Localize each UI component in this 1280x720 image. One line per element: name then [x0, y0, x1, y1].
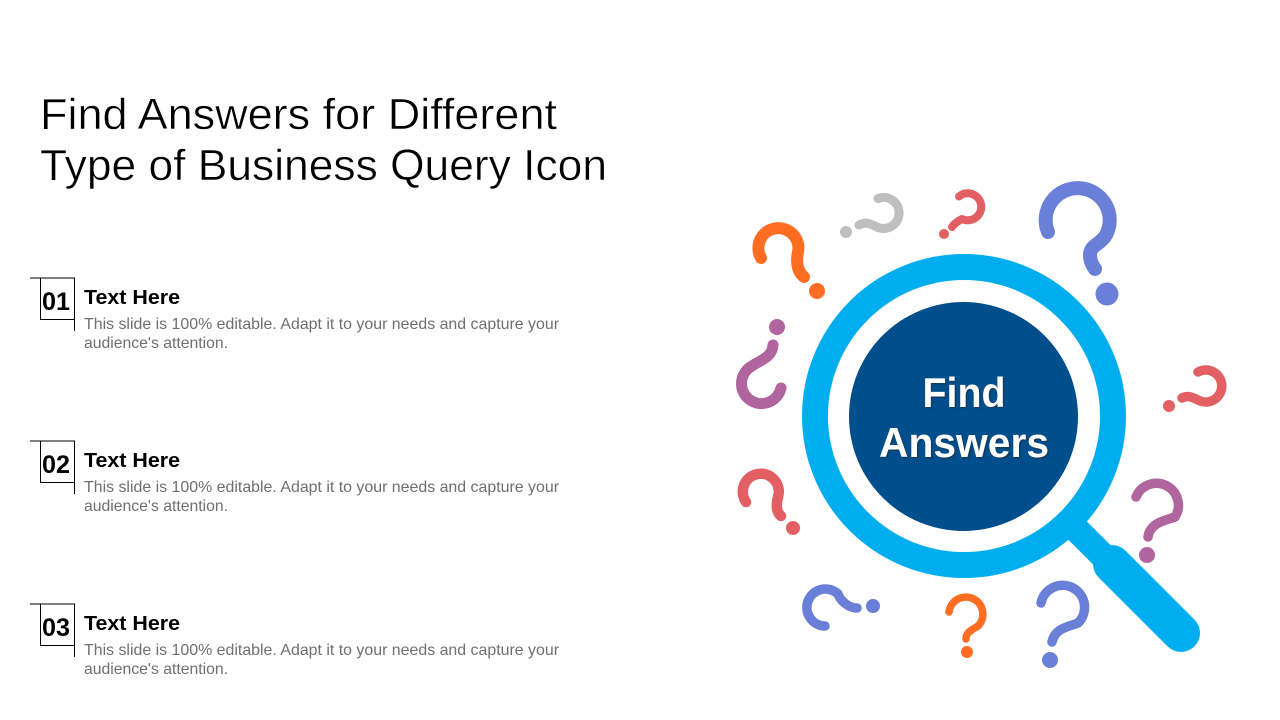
icon: blue question mark bottom: [1041, 585, 1085, 668]
number badge 02: 02: [42, 451, 70, 479]
handle: [1062, 515, 1181, 633]
number badge 03: 03: [42, 614, 70, 642]
item heading 01: Text Here: [84, 286, 180, 309]
icon: purple question mark right: [1136, 483, 1178, 563]
icon: orange question mark bottom: [949, 597, 983, 658]
item 01: [30, 278, 560, 352]
lens centre: [849, 302, 1078, 531]
item body 01: [84, 316, 560, 352]
lens ring: [815, 267, 1113, 565]
title: Find Answers for Different: [40, 90, 557, 139]
item heading 02: Text Here: [84, 449, 180, 472]
number badge 01: [30, 278, 74, 331]
icon: blue question mark large: [1046, 188, 1118, 306]
item body 03: [84, 642, 560, 678]
item body 03: This slide is 100% editable. Adapt it to your needs and capture your: [84, 642, 560, 659]
lens label: Find: [924, 370, 1007, 418]
item 02: [30, 441, 560, 515]
title: Type of Business Query Icon: [40, 141, 607, 190]
magnifying glass: [815, 267, 1181, 633]
number badge 03: [30, 604, 74, 657]
icon: purple question mark left: [741, 319, 785, 404]
icon: orange question mark upper left: [758, 228, 825, 299]
item 03: [30, 604, 560, 678]
title: [40, 90, 607, 190]
icon: grey question mark: [840, 197, 899, 238]
item body 02: [84, 479, 560, 515]
lens label: Find: [922, 369, 1006, 416]
item body 02: This slide is 100% editable. Adapt it to your needs and capture your: [84, 479, 560, 496]
item body 03: audience's attention.: [84, 661, 228, 678]
icon: red question mark lower left: [743, 474, 800, 535]
item body 02: audience's attention.: [84, 498, 228, 515]
icon: blue question mark lower: [807, 589, 880, 626]
lens label: Answers: [880, 420, 1050, 468]
item body 01: audience's attention.: [84, 335, 228, 352]
icon: red question mark right: [1163, 370, 1222, 412]
icon: red question mark top: [939, 193, 981, 239]
number badge 01: 01: [42, 288, 70, 316]
item heading 03: Text Here: [84, 612, 180, 635]
lens label: [879, 369, 1050, 468]
item body 01: This slide is 100% editable. Adapt it to your needs and capture your: [84, 316, 560, 333]
number badge 02: [30, 441, 74, 494]
lens label: Answers: [879, 419, 1049, 466]
